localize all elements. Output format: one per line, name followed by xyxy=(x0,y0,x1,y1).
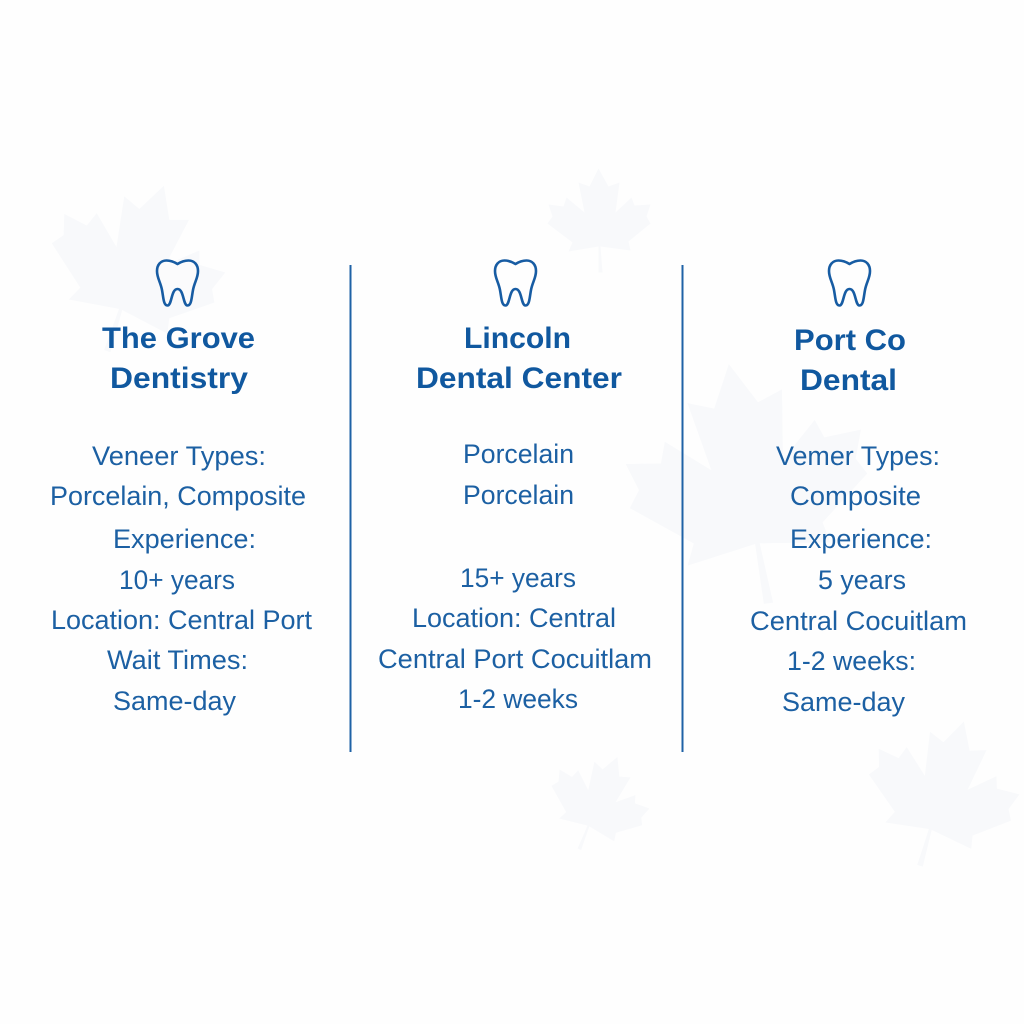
details: The Grove Dentistry xyxy=(50,441,312,716)
heading: Port Co Dental: Dental xyxy=(800,364,897,397)
divider: left xyxy=(350,265,352,752)
details: The Grove Dentistry: Location: Central Port xyxy=(51,605,312,635)
heading: The Grove Dentistry xyxy=(102,322,255,395)
icon: tooth xyxy=(829,260,870,306)
heading: Lincoln Dental Center xyxy=(416,322,622,395)
background maple leaves xyxy=(24,156,1024,888)
details: Port Co Dental: Experience: xyxy=(790,524,932,554)
details: Port Co Dental: Composite xyxy=(790,481,921,511)
details: Port Co Dental: Same-day xyxy=(782,687,905,717)
details: The Grove Dentistry: Porcelain, Composite xyxy=(50,481,306,511)
details: Port Co Dental: Vemer Types: xyxy=(776,441,940,471)
details: The Grove Dentistry: 10+ years xyxy=(119,565,235,595)
details: Lincoln Dental Center: 1-2 weeks xyxy=(458,684,578,714)
details: Port Co Dental: Central Cocuitlam xyxy=(750,606,967,636)
details: Lincoln Dental Center: 15+ years xyxy=(460,563,576,593)
icon: tooth xyxy=(157,260,198,306)
details: Port Co Dental xyxy=(750,441,967,717)
panel: Port Co Dental xyxy=(750,260,967,717)
heading: Port Co Dental xyxy=(794,324,906,397)
details: Lincoln Dental Center: Location: Central xyxy=(412,603,616,633)
heading: Lincoln Dental Center: Dental Center xyxy=(416,362,622,395)
details: Port Co Dental: 1-2 weeks: xyxy=(787,646,916,676)
details: Lincoln Dental Center: Porcelain xyxy=(463,439,574,469)
details: Lincoln Dental Center xyxy=(378,439,652,714)
details: The Grove Dentistry: Experience: xyxy=(113,524,256,554)
panel: The Grove Dentistry xyxy=(50,260,312,716)
details: The Grove Dentistry: Wait Times: xyxy=(107,645,248,675)
details: Lincoln Dental Center: Central Port Cocuitlam xyxy=(378,644,652,674)
details: Port Co Dental: 5 years xyxy=(818,565,906,595)
heading: Lincoln Dental Center: Lincoln xyxy=(464,322,571,355)
details: The Grove Dentistry: Veneer Types: xyxy=(92,441,266,471)
panel: Lincoln Dental Center xyxy=(378,260,652,714)
heading: The Grove Dentistry: Dentistry xyxy=(110,362,248,395)
heading: The Grove Dentistry: The Grove xyxy=(102,322,255,355)
divider: right xyxy=(682,265,684,752)
icon: tooth xyxy=(495,260,536,306)
details: The Grove Dentistry: Same-day xyxy=(113,686,236,716)
heading: Port Co Dental: Port Co xyxy=(794,324,906,357)
details: Lincoln Dental Center: Porcelain xyxy=(463,480,574,510)
